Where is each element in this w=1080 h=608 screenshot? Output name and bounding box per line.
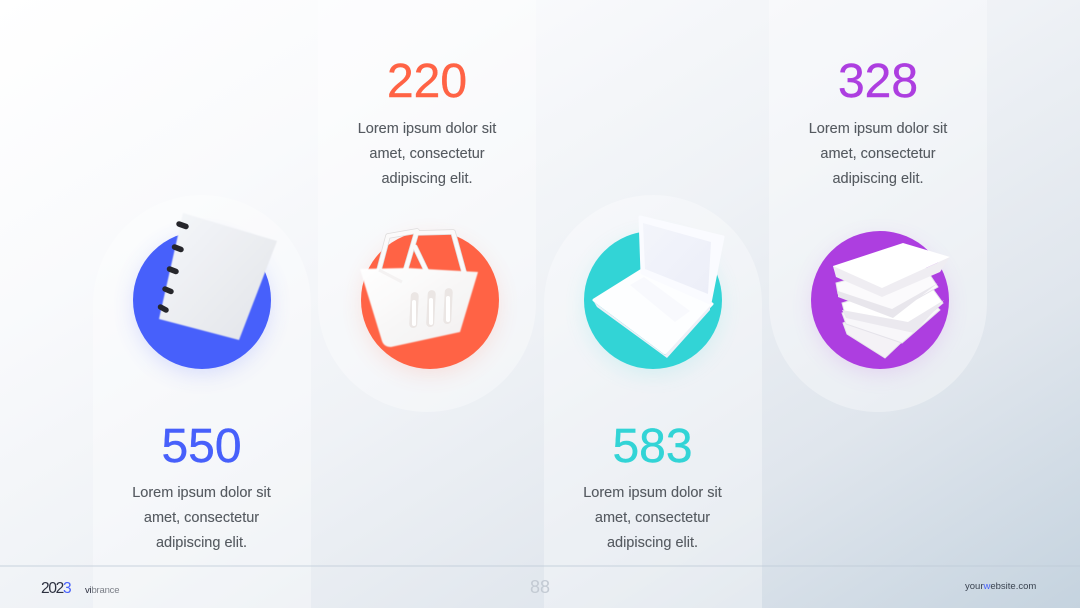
- text: column 3 description: [583, 485, 722, 551]
- footer: page number: 88: [530, 577, 550, 597]
- icon: laptop on teal circle: [584, 217, 723, 372]
- icon: shopping basket on red circle: [360, 231, 499, 372]
- text: column 1 description: adipiscing elit.: [156, 535, 247, 551]
- panel: column 3 background pill: [544, 195, 762, 608]
- stat: 328: 328: [838, 55, 918, 108]
- text: column 4 description: adipiscing elit.: [832, 171, 924, 187]
- text: column 2 description: Lorem ipsum dolor sit: [358, 121, 496, 137]
- footer: website: yourwebsite.com: [965, 581, 1036, 592]
- text: column 3 description: amet, consectetur: [595, 510, 710, 526]
- footer: year: 2023: [41, 580, 70, 597]
- text: column 3 description: Lorem ipsum dolor sit: [583, 485, 722, 501]
- text: column 2 description: adipiscing elit.: [381, 171, 473, 187]
- text: column 4 description: [809, 121, 948, 187]
- text: column 1 description: [132, 485, 271, 551]
- panel: column 4 background pill: [769, 0, 987, 412]
- text: column 1 description: amet, consectetur: [144, 510, 259, 526]
- icon: book stack on purple circle: [811, 231, 950, 372]
- text: column 2 description: amet, consectetur: [369, 146, 485, 162]
- text: column 2 description: [358, 121, 496, 187]
- stat: 583: 583: [612, 420, 693, 473]
- text: column 4 description: amet, consectetur: [820, 146, 936, 162]
- text: column 4 description: Lorem ipsum dolor sit: [809, 121, 947, 137]
- panel: column 1 background pill: [93, 195, 311, 608]
- footer divider: [0, 565, 1080, 567]
- text: column 1 description: Lorem ipsum dolor sit: [132, 485, 271, 501]
- panel: column 2 background pill: [318, 0, 536, 412]
- footer: brand: vibrance: [85, 585, 119, 596]
- stat: 220: 220: [387, 55, 467, 108]
- stat: 550: 550: [161, 420, 242, 473]
- icon: notebook on blue circle: [133, 213, 277, 372]
- text: column 3 description: adipiscing elit.: [607, 535, 698, 551]
